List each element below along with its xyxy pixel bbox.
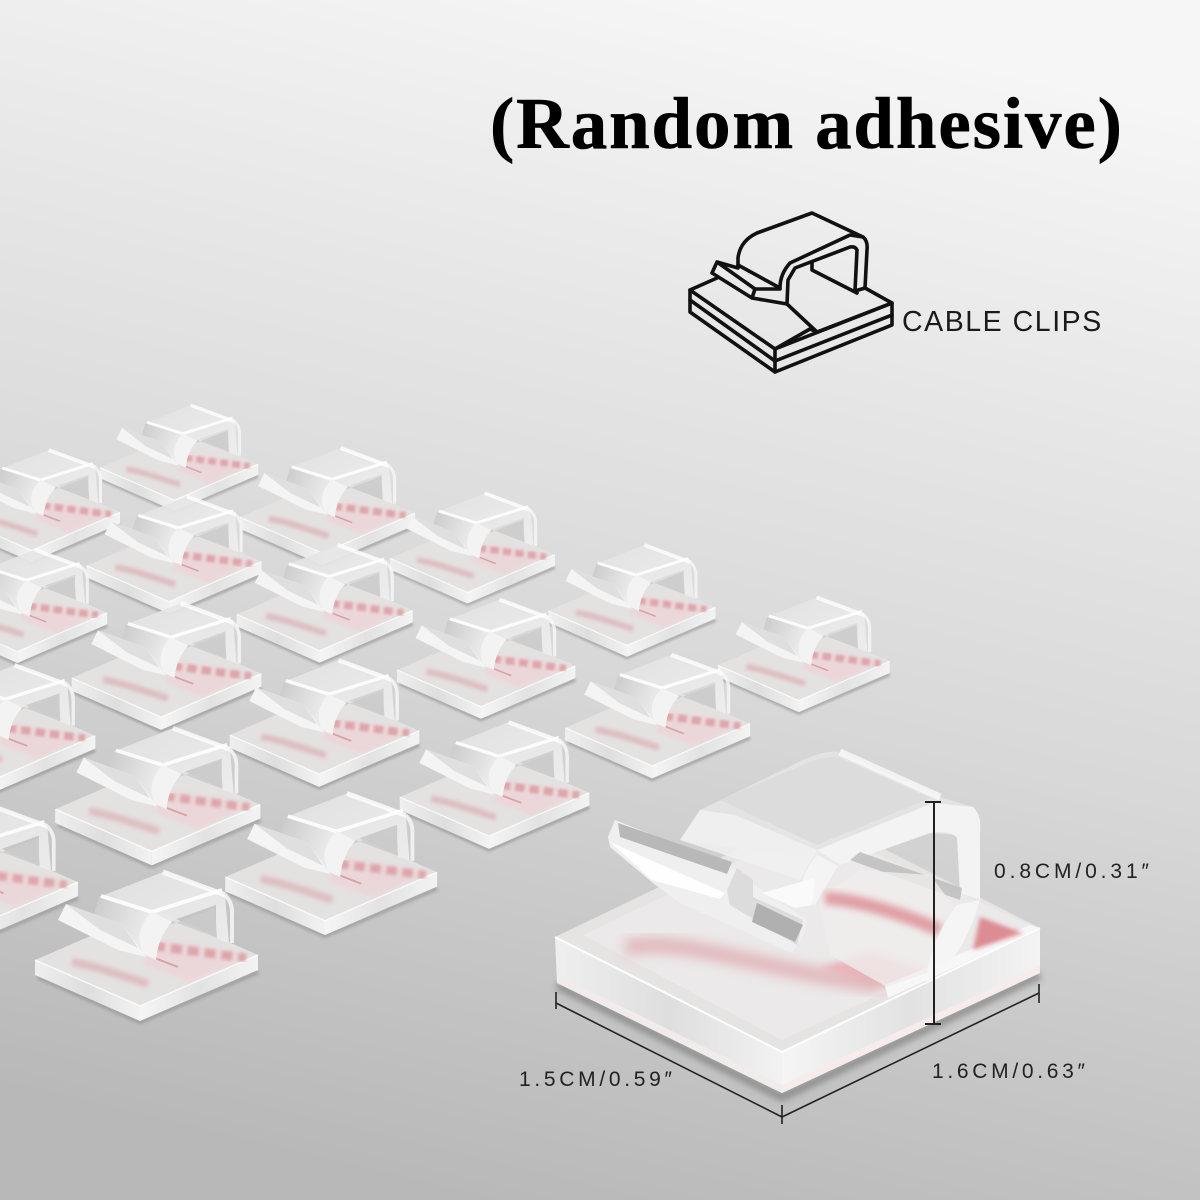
clip 3 <box>240 448 415 566</box>
clip 4 <box>390 493 555 604</box>
large clip hook <box>608 820 815 953</box>
clip 2 <box>0 450 120 562</box>
clip 1 <box>100 405 258 512</box>
clip 15 <box>400 722 589 850</box>
clip grid <box>0 405 890 1022</box>
clip 9 <box>237 545 413 663</box>
large clip <box>555 752 1040 1097</box>
large clip arch <box>680 752 980 987</box>
icon label: CABLE CLIPS <box>902 306 1103 338</box>
clip 19 <box>35 872 258 1022</box>
clip 6 <box>718 597 890 713</box>
clip 14 <box>230 660 419 788</box>
large clip shadow <box>557 975 1040 1097</box>
clip 18 <box>225 793 437 936</box>
dimension: depth label: 1.5CM/0.59″ <box>519 1068 676 1091</box>
icon: cable clip line drawing <box>690 213 892 372</box>
clip 8 <box>0 550 107 664</box>
clip 16 <box>55 728 260 866</box>
clip 10 <box>397 600 575 720</box>
large clip base <box>555 813 1040 1093</box>
dimension: height line <box>925 802 941 1024</box>
title: (Random adhesive) <box>490 83 1124 164</box>
clip 12 <box>72 603 261 731</box>
clip 7 <box>86 497 262 614</box>
clip 11 <box>565 655 750 779</box>
clip 5 <box>548 545 716 658</box>
clip 17 <box>0 805 78 944</box>
clip 13 <box>0 665 95 793</box>
dimension: height label: 0.8CM/0.31″ <box>994 860 1153 883</box>
dimension: width line <box>782 984 1039 1117</box>
dimension: width label: 1.6CM/0.63″ <box>932 1060 1089 1083</box>
dimension: depth line <box>556 992 782 1124</box>
